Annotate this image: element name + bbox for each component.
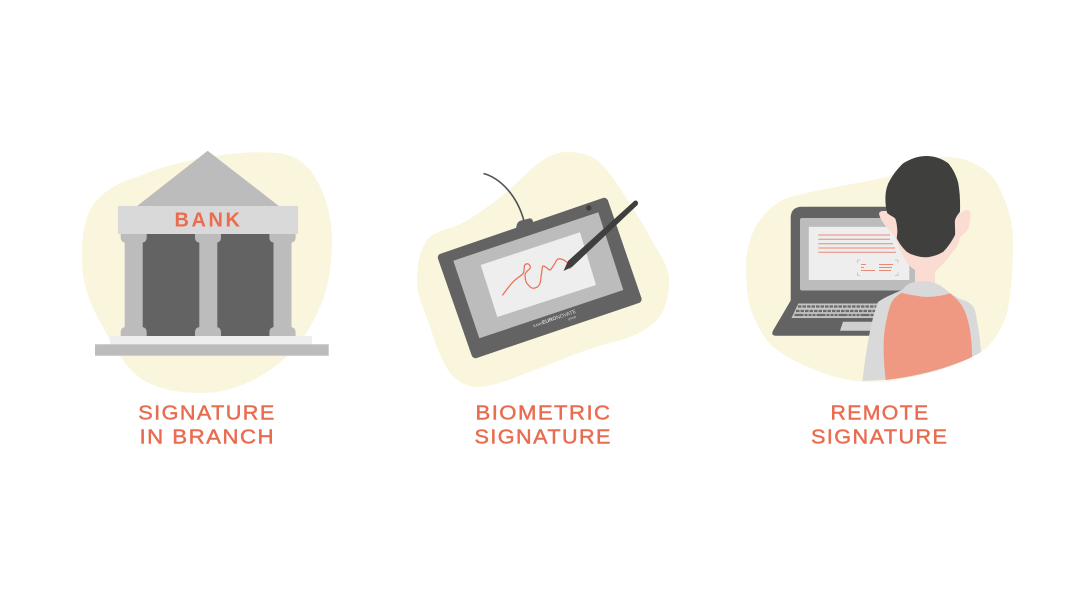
bank sign: BANK — [174, 210, 241, 232]
label: biometric signature: BIOMETRIC — [476, 402, 612, 424]
tablet connector — [516, 218, 534, 228]
panel: biometric signature — [417, 152, 669, 448]
label: remote signature: REMOTE — [830, 402, 930, 424]
torso — [862, 290, 981, 381]
tablet screen — [453, 212, 623, 338]
icon: laptop — [772, 207, 915, 336]
camera — [586, 205, 591, 211]
tablet body — [442, 202, 638, 354]
hair — [885, 156, 960, 257]
signature box — [858, 260, 898, 276]
tablet logo: group — [568, 315, 577, 321]
icon: bank building — [95, 151, 329, 356]
collar — [902, 281, 950, 297]
keyboard — [792, 304, 885, 318]
trackpad — [840, 322, 880, 331]
label: signature in branch — [138, 402, 276, 448]
background blob: biometric — [417, 152, 669, 387]
label: biometric signature — [474, 402, 612, 448]
vest — [884, 293, 972, 380]
label: remote signature — [811, 402, 948, 448]
background blob: remote — [746, 157, 1013, 382]
laptop screen — [800, 218, 915, 290]
laptop base — [772, 300, 900, 336]
label: signature in branch: SIGNATURE — [138, 402, 276, 424]
panel: remote signature — [746, 156, 1013, 448]
label: signature in branch: IN BRANCH — [140, 426, 275, 448]
face and ears — [879, 210, 971, 273]
icon: person — [862, 156, 981, 381]
document lines — [818, 235, 896, 252]
icon: signature tablet — [442, 174, 638, 354]
label: remote signature: SIGNATURE — [811, 426, 948, 448]
tablet cable — [484, 174, 524, 221]
tablet logo: BANKEURONOVATE — [532, 309, 577, 329]
panel: signature in branch — [82, 151, 332, 448]
background blob: branch — [82, 152, 332, 393]
stylus pen — [564, 201, 638, 271]
neck — [915, 262, 935, 285]
handwritten signature — [503, 259, 570, 295]
laptop lid — [791, 207, 915, 302]
label: biometric signature: SIGNATURE — [474, 426, 612, 448]
